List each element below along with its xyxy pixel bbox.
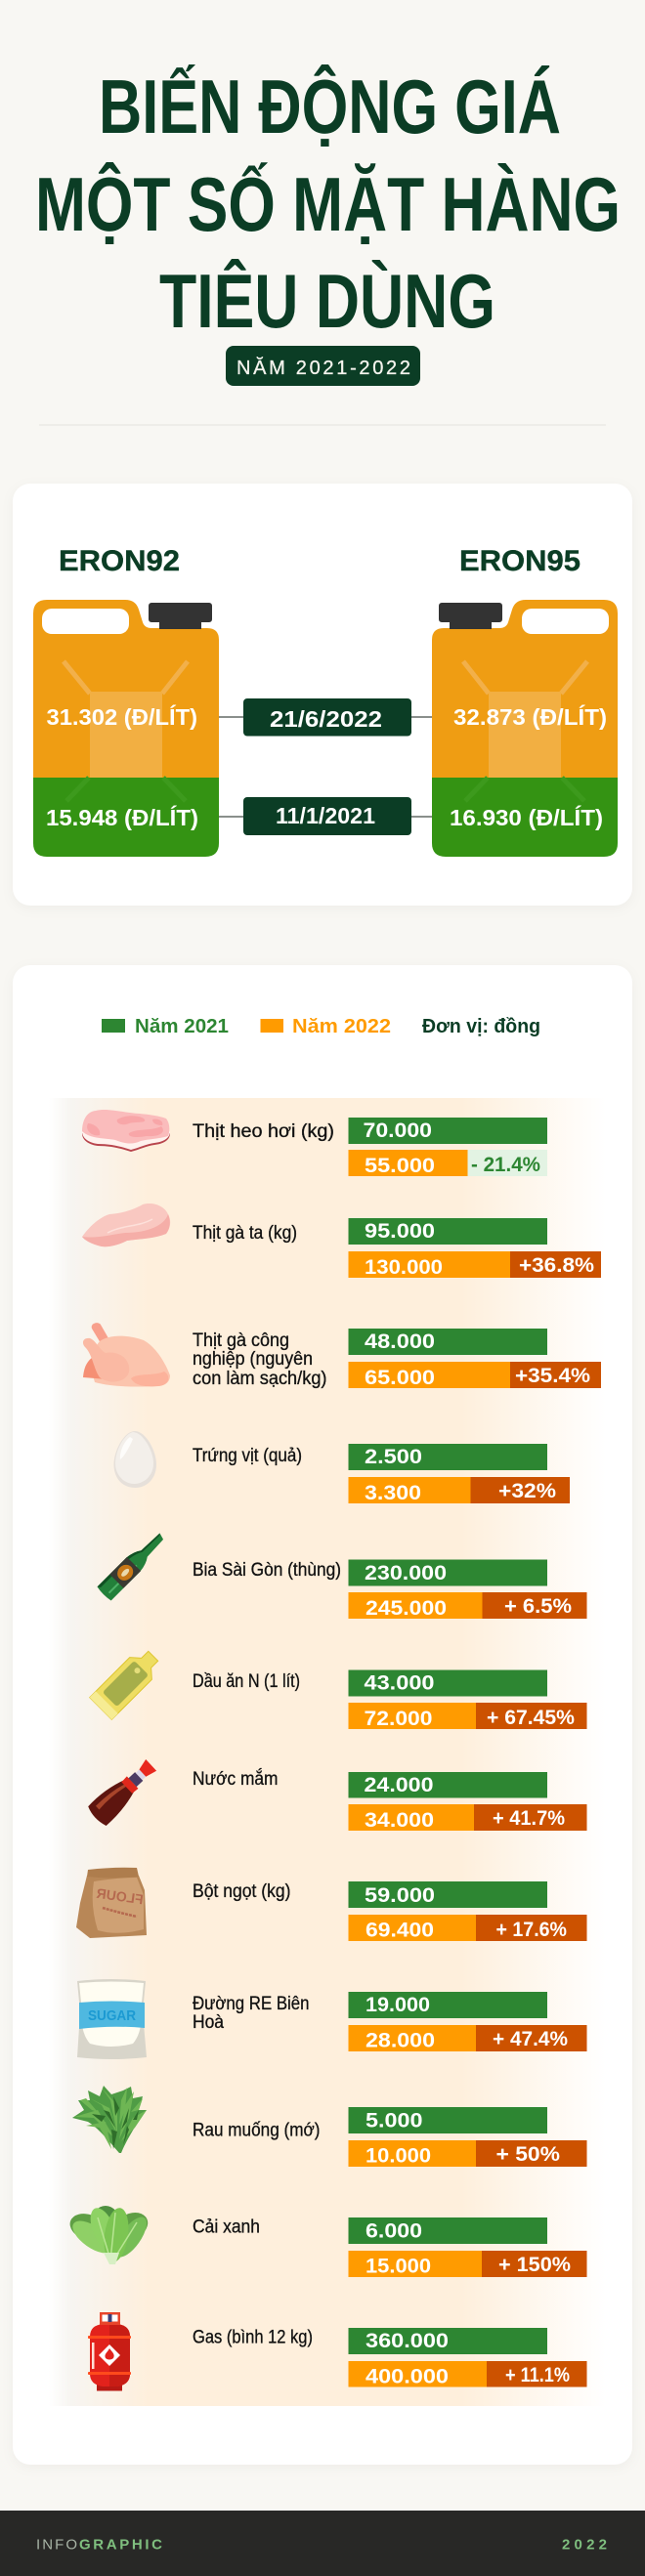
label: Rau muống (mớ) [193, 2120, 321, 2141]
label: Dầu ăn N (1 lít) [193, 1671, 300, 1692]
bar: 2021: 360.000 [366, 2330, 449, 2352]
label: Đường RE Biên [193, 1994, 309, 2014]
icon: chicken breast [82, 1204, 170, 1246]
icon: left fuel can [33, 600, 219, 857]
bar: 2022: + 41.7% [493, 1807, 565, 1830]
bar: 2022 [348, 1477, 570, 1504]
price: ERON92 2021: 15.948 (Đ/LÍT) [46, 804, 198, 830]
bar: 2022: 400.000 [366, 2366, 449, 2387]
legend: Năm 2021 [135, 1016, 229, 1037]
footer [0, 2511, 645, 2576]
bar: 2021: 59.000 [365, 1884, 435, 1907]
title [35, 63, 621, 344]
bar: 2021: 230.000 [365, 1562, 447, 1584]
label: Trứng vịt (quả) [193, 1446, 302, 1466]
bar: 2022 [348, 2025, 586, 2051]
row: Thịt gà công nghiệp [83, 1323, 601, 1389]
label [193, 1330, 326, 1389]
icon: mustard greens [66, 2205, 152, 2264]
bar: 2021 [348, 1772, 547, 1797]
bar: 2022: +36.8% [519, 1254, 594, 1277]
row: Rau muống [72, 2086, 586, 2167]
subtitle badge: NĂM 2021-2022 [236, 357, 410, 379]
bar: 2022: + 50% [496, 2143, 560, 2166]
bar: 2021: 48.000 [365, 1330, 435, 1353]
bar: 2022 [348, 2361, 586, 2387]
row: Bột ngọt [76, 1868, 586, 1942]
label: Nước mắm [193, 1768, 278, 1790]
bar: 2022: 3.300 [365, 1482, 421, 1504]
heading: ERON95: ERON95 [459, 545, 580, 577]
bar: 2021: 24.000 [364, 1774, 434, 1796]
bar: 2021 [348, 2107, 547, 2133]
footer: GRAPHIC [79, 2536, 162, 2554]
label: Hoà [193, 2012, 224, 2033]
row: Gas [88, 2312, 586, 2391]
icon: sugar sack: SUGAR [88, 2008, 136, 2024]
icon: water spinach [72, 2086, 147, 2153]
bar: 2022 [348, 1150, 547, 1177]
label: Bia Sài Gòn (thùng) [193, 1560, 341, 1581]
icon: cooking oil bottle [90, 1645, 164, 1719]
bar: 2022 [348, 1703, 586, 1730]
icon: gas cylinder [88, 2312, 131, 2391]
bar: 2022 [348, 2251, 586, 2278]
label: Gas (bình 12 kg) [193, 2327, 313, 2348]
bar: 2021: 43.000 [364, 1672, 434, 1694]
row: Bia Sài Gòn [97, 1529, 586, 1620]
price: ERON95 2021: 16.930 (Đ/LÍT) [450, 804, 603, 830]
icon: paper bag [76, 1868, 147, 1938]
bar: 2021 [348, 1559, 547, 1586]
label: Thịt heo hơi (kg) [193, 1121, 334, 1142]
date badge: 11/1/2021 [243, 797, 411, 835]
bar: 2021: 19.000 [366, 1994, 430, 2016]
bar: 2022: + 47.4% [493, 2028, 568, 2050]
bar: 2021: 5.000 [366, 2110, 422, 2132]
bar: 2022 [348, 2140, 586, 2167]
bar: 2021: 70.000 [364, 1119, 432, 1142]
bar: 2022: +32% [498, 1480, 556, 1502]
label: Cải xanh [193, 2217, 260, 2237]
bar: 2022: +35.4% [515, 1365, 590, 1387]
bar: 2021: 95.000 [365, 1220, 435, 1243]
bar: 2022: + 11.1% [505, 2364, 570, 2386]
bar: 2022: 65.000 [365, 1367, 435, 1389]
bar: 2021 [348, 1118, 547, 1144]
panel: fuel prices [13, 484, 632, 906]
icon: egg [113, 1431, 156, 1488]
price: ERON92 2022: 31.302 (Đ/LÍT) [47, 703, 197, 730]
panel: consumer prices [13, 965, 632, 2465]
legend [102, 1016, 540, 1037]
bar: 2022: 15.000 [366, 2255, 431, 2278]
bar: 2022: + 6.5% [504, 1595, 572, 1618]
bar: 2022: 72.000 [364, 1708, 432, 1730]
legend: Đơn vị: đồng [422, 1016, 540, 1037]
row: Nước mắm [86, 1755, 587, 1832]
bar: 2021 [348, 1992, 547, 2018]
bar: 2022: 10.000 [366, 2145, 431, 2167]
row: Đường RE Biên Hoà [77, 1979, 586, 2059]
label [193, 1994, 309, 2033]
price: ERON95 2022: 32.873 (Đ/LÍT) [453, 703, 607, 730]
bar: 2022: 34.000 [365, 1809, 434, 1832]
row: Dầu ăn [90, 1645, 587, 1730]
icon: pork [82, 1110, 170, 1152]
date badge: 11/1/2021: 11/1/2021 [276, 803, 375, 828]
icon: whole chicken [83, 1323, 170, 1387]
bar: 2021 [348, 1329, 547, 1355]
legend: Năm 2022 [292, 1016, 391, 1037]
bar: 2021: 2.500 [365, 1446, 422, 1468]
bar: 2021 [348, 1670, 547, 1696]
row: Thịt gà ta [82, 1204, 601, 1279]
label: Bột ngọt (kg) [193, 1881, 291, 1902]
date badge: 21/6/2022: 21/6/2022 [270, 706, 382, 732]
row: Thịt heo hơi [82, 1110, 547, 1177]
bar: 2022: 69.400 [366, 1919, 434, 1942]
bar: 2022: + 17.6% [496, 1919, 567, 1941]
icon: beer bottle [97, 1529, 169, 1601]
label: con làm sạch/kg) [193, 1369, 326, 1389]
label: nghiệp (nguyên [193, 1349, 313, 1370]
icon: paper bag: FLOUR [96, 1885, 145, 1907]
row: Trứng vịt [113, 1431, 570, 1504]
bar: 2021 [348, 1881, 547, 1908]
row: Cải xanh [66, 2205, 586, 2278]
bar: 2022: 28.000 [366, 2030, 435, 2051]
bar: 2022 [348, 1592, 586, 1620]
bar: 2022 [348, 1804, 586, 1832]
bar: 2022 [348, 1251, 601, 1279]
heading: ERON92: ERON92 [59, 545, 180, 577]
bar: 2022: 55.000 [365, 1155, 435, 1177]
bar: 2022: + 150% [498, 2254, 571, 2276]
bar: 2022 [348, 1915, 586, 1942]
bar: 2022: + 67.45% [487, 1707, 575, 1729]
bar: 2022: 245.000 [366, 1597, 447, 1620]
label: Thịt gà ta (kg) [193, 1223, 297, 1244]
footer: INFO [36, 2536, 77, 2554]
icon: fish sauce bottle [86, 1755, 160, 1828]
bar: 2021 [348, 2217, 547, 2244]
icon: right fuel can [432, 600, 618, 857]
bar: 2022: 130.000 [365, 1256, 443, 1279]
bar: 2022 [348, 1362, 601, 1389]
icon: sugar sack [77, 1979, 147, 2059]
date badge: 21/6/2022 [243, 698, 411, 737]
bar: 2021: 6.000 [366, 2219, 422, 2243]
footer: 2022 [562, 2536, 607, 2554]
title: TIÊU DÙNG [159, 258, 495, 344]
bar: 2022: - 21.4% [471, 1154, 540, 1176]
bar: 2021 [348, 2328, 547, 2354]
label: Thịt gà công [193, 1330, 289, 1351]
subtitle badge [226, 346, 420, 386]
bar: 2021 [348, 1218, 547, 1245]
bar: 2021 [348, 1444, 547, 1470]
